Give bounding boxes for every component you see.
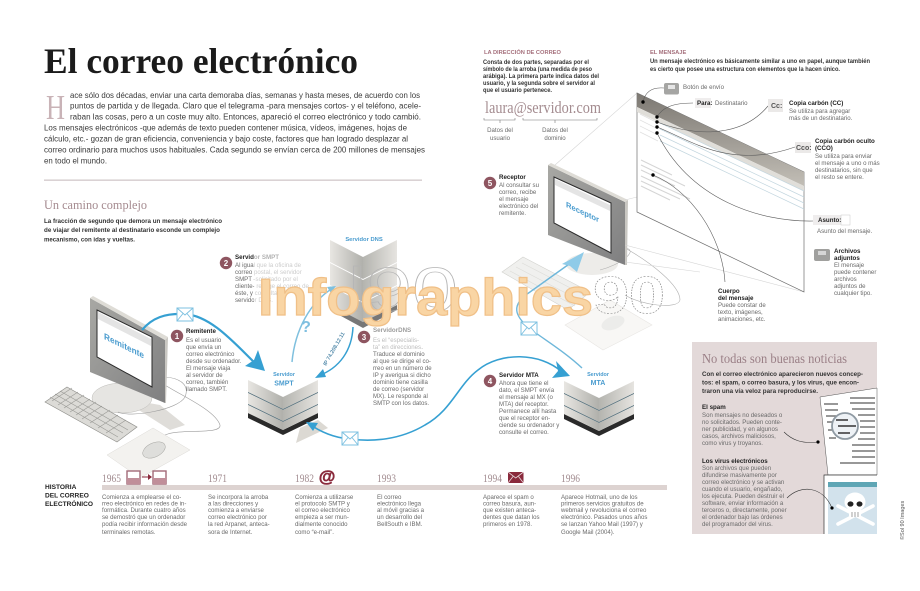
- callout: cco: el resto se entere.: [815, 174, 864, 181]
- entry 1994: que existen anteca-: [483, 507, 536, 514]
- step 1: remitente: [171, 328, 242, 393]
- spam callout line: [784, 432, 820, 444]
- step 3: servidor DNS: al que se dirige el co-: [373, 358, 431, 365]
- credit: ©Sol 90 Images: [899, 501, 906, 540]
- entry 1993: BellSouth e IBM.: [377, 521, 423, 528]
- block: los virus electrónicos: Los virus electrónicos: [702, 458, 768, 465]
- callout: cuerpo del mensaje: del mensaje: [718, 295, 754, 302]
- callout: cc: Cc:: [771, 103, 782, 110]
- callout: cco: (CCO): [815, 145, 833, 152]
- panel intro: Con el correo electrónico aparecieron nuevos concep-: [702, 371, 863, 378]
- block: el spam: El spam: [702, 404, 726, 411]
- entry 1965: [102, 471, 188, 536]
- step 4: servidor MTA: 4: [488, 377, 493, 386]
- step 3: servidor DNS: Traduce el dominio: [373, 351, 425, 358]
- step 3: servidor DNS: IP y averigua si dicho: [373, 372, 431, 379]
- arrow: SMPT to MTA: [306, 357, 570, 445]
- entry 1965: se demostró que un ordenador: [102, 514, 185, 521]
- step 3: servidor DNS: dominio tiene casilla: [373, 379, 428, 386]
- step 3: servidor DNS: de correo (servidor: [373, 386, 424, 393]
- step 5: receptor: Al consultar su: [499, 182, 539, 189]
- callout: archivos adjuntos: adjuntos de: [834, 283, 866, 290]
- icon: attachments: [814, 249, 830, 261]
- entry 1982: dialmente conocido: [295, 521, 348, 528]
- block: los virus electrónicos: terceros o, directamente, poner: [702, 507, 787, 514]
- step 1: remitente: desde su ordenador.: [186, 358, 242, 365]
- entry 1965: rreo electrónico en redes de in-: [102, 500, 186, 508]
- description: [483, 59, 599, 94]
- entry 1971: Se incorpora la arroba: [208, 494, 269, 501]
- section heading: un camino complejo: Un camino complejo: [44, 197, 147, 212]
- callout: cc: [768, 99, 853, 122]
- step 4: servidor MTA: [484, 372, 560, 436]
- description: arábiga). La primera parte indica datos del: [483, 73, 599, 80]
- entry 1982: el protocolo SMTP y: [295, 500, 351, 508]
- arrow: SMPT to DNS question: [292, 286, 336, 362]
- block: los virus electrónicos: correo electrónico y se activan: [702, 479, 784, 486]
- step 1: remitente: correo electrónico: [186, 351, 235, 358]
- projection lines: [555, 93, 804, 292]
- step 4: servidor MTA: dato, el SMPT envía: [499, 387, 555, 394]
- entry 1996: Google Mail (2004).: [561, 529, 615, 536]
- heading: LA DIRECCIÓN DE CORREO: [484, 48, 561, 56]
- step 3: servidor DNS: 3: [362, 333, 367, 342]
- description: Consta de dos partes, separadas por el: [483, 59, 589, 66]
- callout: cc: Copia carbón (CC): [789, 100, 843, 107]
- entry 1994: Aparece el spam o: [483, 494, 534, 501]
- server: MTA: MTA: [591, 380, 605, 387]
- skull and bones: [838, 492, 873, 524]
- timeline bar: [102, 485, 667, 490]
- entry 1982: Comienza a utilizarse: [295, 494, 354, 501]
- callout: asunto: [813, 215, 873, 235]
- step 2: servidor SMPT: SMPT -solicitado por el: [235, 276, 298, 283]
- entry 1971: sora de Internet.: [208, 529, 253, 536]
- description: usuario, y la segunda sobre el servidor al: [483, 80, 595, 87]
- label: datos del dominio: Datos del: [542, 127, 568, 134]
- step 4: servidor MTA: ciende su ordenador y: [499, 422, 560, 429]
- step 2: servidor SMPT: Servidor SMPT: [235, 254, 279, 261]
- image: spam inbox: [820, 388, 877, 475]
- step 3: servidor DNS: Es el “especialis-: [373, 337, 419, 344]
- block: el spam: ner publicidad, y en algunos: [702, 426, 778, 433]
- callout: cco: Copia carbón oculto: [815, 138, 875, 145]
- computer: remitente: [45, 296, 220, 478]
- intro text block: raban las cosas, pero a un coste muy alto. Entonces, apareció el correo electrónico y todo cambió.: [70, 112, 421, 121]
- mouse: [600, 313, 626, 333]
- callout: archivos adjuntos: El mensaje: [834, 262, 865, 269]
- callout: cco: destinatarios, sin que: [815, 167, 873, 174]
- callout: cco: el mensaje a uno o más: [815, 160, 880, 167]
- icon: envelope: [342, 432, 358, 445]
- stand: [566, 253, 618, 275]
- cable: [600, 248, 680, 305]
- magnifier: [832, 413, 858, 439]
- step 1: remitente: correo, también: [186, 379, 228, 386]
- icon: send button: [664, 83, 679, 94]
- callout: archivos adjuntos: puede contener: [834, 269, 876, 276]
- block: los virus electrónicos: difundirse masivamente por: [702, 472, 777, 479]
- arrow: DNS to SMPT with IP: [315, 327, 353, 378]
- block: el spam: casos, archivos maliciosos,: [702, 433, 776, 440]
- label: para: Destinatario: [715, 100, 748, 107]
- entry 1965: formática. Durante cuatro años: [102, 507, 186, 514]
- panel: el mensaje: es cierto que posee una estructura con elementos que la hacen único.: [650, 66, 840, 73]
- block: los virus electrónicos: del programador del virus.: [702, 521, 773, 528]
- mouse pad: [107, 428, 190, 478]
- description: que el usuario pertenece.: [483, 87, 552, 94]
- step 2: servidor SMPT: Al igual que la oficina de: [235, 262, 302, 269]
- step 3: servidor DNS: SMTP con los datos.: [373, 400, 429, 407]
- step 1: remitente: al servidor de: [186, 372, 223, 379]
- step 5: receptor: Receptor: [499, 174, 526, 181]
- step 5: receptor: [484, 174, 539, 217]
- callout: cuerpo del mensaje: Cuerpo: [718, 288, 740, 295]
- block: los virus electrónicos: Son archivos que pueden: [702, 465, 771, 472]
- step 3: servidor DNS: ServidorDNS: [373, 327, 411, 334]
- entry 1982: empieza a ser mun-: [295, 514, 349, 521]
- mouse pad: [565, 300, 652, 350]
- icon: red envelope: [508, 472, 524, 483]
- entry 1994: [483, 471, 540, 528]
- block: los virus electrónicos: cuando el usuario, engañado,: [702, 486, 783, 493]
- entry 1971: la red Arpanet, anteca-: [208, 521, 270, 528]
- step 4: servidor MTA: Permanece allí hasta: [499, 408, 557, 415]
- icon: at sign: @: [319, 467, 335, 486]
- entry 1996: electrónico. Pasados unos años: [561, 514, 647, 521]
- timeline title: ELECTRÓNICO: [45, 499, 93, 508]
- callout: asunto: Asunto del mensaje.: [817, 228, 873, 235]
- computer: receptor: [502, 163, 680, 350]
- entry 1982: como “e-mail”.: [295, 529, 334, 536]
- entry 1993: 1993: [377, 471, 396, 485]
- step 3: servidor DNS: MX). Le responde al: [373, 393, 428, 400]
- block: los virus electrónicos: el ordenador bajo las órdenes: [702, 514, 783, 521]
- step 1: remitente: que envía un: [186, 344, 221, 351]
- watermark orange text: Infographics: [258, 269, 593, 327]
- step 4: servidor MTA: MTA) del receptor.: [499, 401, 549, 408]
- step 2: servidor SMPT: éste, y consulta al: [235, 290, 284, 297]
- label: botón de envío: Botón de envío: [683, 84, 725, 91]
- icon: envelope: [177, 308, 193, 321]
- monitor: [548, 165, 625, 265]
- callout: archivos adjuntos: Archivos: [834, 248, 861, 255]
- description: Un mensaje electrónico es básicamente similar a uno en papel, aunque también: [650, 58, 870, 65]
- callout: cc: más de un destinatario.: [789, 115, 853, 122]
- panel: la dirección de correo: dominio: [544, 135, 566, 142]
- step 2: servidor SMPT: [220, 254, 309, 304]
- server: SMPT: SMPT: [274, 380, 294, 388]
- brackets: [484, 118, 597, 123]
- block: el spam: Son mensajes no deseados o: [702, 412, 783, 419]
- server label: Servidor: [587, 372, 610, 378]
- callout: cco: Cco:: [796, 145, 812, 152]
- entry 1965: terminales remotas.: [102, 529, 156, 536]
- entry 1994: correo basura, aun-: [483, 500, 536, 508]
- callout: archivos adjuntos: cualquier tipo.: [834, 290, 872, 297]
- step 3: servidor DNS: [358, 327, 432, 407]
- entry 1982: [295, 471, 354, 536]
- cables: [118, 377, 220, 440]
- arrow: MTA to receptor: [517, 252, 584, 368]
- entry 1971: comienza a enviarse: [208, 507, 264, 514]
- server: DNS: [330, 222, 397, 328]
- step 5: receptor: correo, recibe: [499, 189, 537, 196]
- screen label: Remitente: [104, 331, 144, 361]
- block: el spam: no solicitados. Pueden conte-: [702, 419, 782, 426]
- step 2: servidor SMPT: 2: [224, 259, 229, 268]
- entry 1971: a las direcciones y: [208, 500, 259, 508]
- step 3: servidor DNS: ta” en direcciones.: [373, 344, 423, 351]
- virus callout line: [787, 489, 834, 510]
- step 5: receptor: electrónico del: [499, 203, 538, 210]
- entry 1994: 1994: [483, 471, 502, 485]
- section intro text: [44, 218, 222, 244]
- icon: envelope: [521, 322, 537, 335]
- title: El correo electrónico: [44, 41, 358, 81]
- block: el spam: como virus y troyanos.: [702, 440, 763, 447]
- entry 1996: 1996: [561, 471, 580, 485]
- panel: no todas son buenas noticias: [692, 342, 877, 534]
- step 2: servidor SMPT: correo postal, el servidor: [235, 269, 302, 276]
- callout: archivos adjuntos: archivos: [834, 276, 857, 283]
- entry 1993: un desarrollo del: [377, 514, 422, 521]
- arrow: remitente to SMPT: [142, 308, 265, 371]
- message window: [637, 93, 804, 292]
- entry 1965: 1965: [102, 471, 121, 485]
- step 4: servidor MTA: consulte el correo.: [499, 429, 549, 436]
- watermark dashed number: 90: [593, 267, 665, 325]
- email address: laura@servidor.com: [485, 98, 601, 117]
- entry 1994: dentes que datan los: [483, 514, 540, 521]
- keyboard: [45, 387, 137, 442]
- label: para: Para:: [697, 100, 712, 107]
- watermark outline: l90: [348, 256, 458, 325]
- server label: Servidor: [273, 372, 296, 378]
- panel: la dirección de correo: usuario: [490, 135, 511, 142]
- step 1: remitente: Remitente: [186, 328, 216, 335]
- callout: cuerpo del mensaje: texto, imágenes,: [718, 309, 763, 316]
- timeline: historia del correo electrónico: [45, 467, 667, 536]
- entry 1971: [208, 471, 270, 536]
- callout dots: [641, 100, 659, 177]
- callout: cuerpo del mensaje: [718, 288, 766, 323]
- panel: la dirección de correo: [483, 48, 601, 142]
- section intro text: La fracción de segundo que demora un mensaje electrónico: [44, 218, 222, 225]
- drop cap: H: [46, 88, 65, 127]
- timeline title: DEL CORREO: [45, 493, 89, 500]
- IP label: IP 74.208.12.11: [323, 331, 347, 367]
- block: los virus electrónicos: los ejecuta. Pueden destruir el: [702, 493, 784, 500]
- timeline title: [45, 484, 93, 508]
- callout: archivos adjuntos: adjuntos: [834, 255, 860, 262]
- entry 1996: se lanzan Yahoo Mail (1997) y: [561, 521, 644, 528]
- step 2: servidor SMPT: servidor DNS.: [235, 297, 273, 304]
- entry 1971: 1971: [208, 471, 227, 485]
- description: símbolo de la arroba (una medida de peso: [483, 66, 592, 73]
- step 4: servidor MTA: que el receptor en-: [499, 415, 550, 422]
- entry 1993: El correo: [377, 494, 402, 501]
- question mark: ?: [301, 319, 311, 336]
- section intro text: de viajar del remitente al destinatario esconde un complejo: [44, 227, 220, 234]
- heading: EL MENSAJE: [650, 50, 686, 56]
- entry 1996: [560, 471, 647, 536]
- intro text block: cálculo, etc.- gozan de gran eficiencia, conveniencia y bajo coste, factores que han logrado desplazar al: [44, 134, 408, 143]
- callout: cuerpo del mensaje: Puede constar de: [718, 302, 766, 309]
- callout lines: [643, 88, 813, 282]
- block: los virus electrónicos: software, enviar información a: [702, 500, 784, 507]
- icon: two computers: [127, 471, 166, 484]
- step 1: remitente: 1: [175, 332, 180, 341]
- callout: asunto: Asunto:: [818, 217, 841, 224]
- entry 1993: [377, 471, 425, 528]
- step 1: remitente: Es el usuario: [186, 337, 222, 344]
- callout: archivos adjuntos: [834, 248, 876, 297]
- entry 1996: webmail y revoluciona el correo: [560, 507, 647, 514]
- block: los virus electrónicos: [702, 458, 787, 528]
- intro text block: puntos de partida y de llegada. Claro que el telegrama -para mensajes cortos- y el teléfono, acele-: [70, 102, 421, 111]
- intro text block: correo ordinario para muchos usos habituales. Cada segundo se envían cerca de 200 millones de mensajes: [44, 145, 425, 154]
- panel intro: traron una vía veloz para reproducirse.: [702, 388, 818, 395]
- step 5: receptor: el mensaje: [499, 196, 529, 203]
- intro text block: [44, 88, 425, 165]
- watermark: [258, 256, 665, 327]
- step 5: receptor: remitente.: [499, 210, 526, 217]
- panel: el mensaje: [555, 50, 880, 323]
- entry 1994: primeros en 1978.: [483, 521, 532, 528]
- entry 1965: podía recibir información desde: [102, 521, 188, 528]
- server: MTA: [564, 362, 634, 436]
- step 4: servidor MTA: Servidor MTA: [499, 372, 539, 379]
- monitor: [90, 298, 165, 403]
- step 1: remitente: El mensaje viaja: [186, 365, 231, 372]
- entry 1982: 1982: [295, 471, 314, 485]
- screen label: Receptor: [566, 199, 600, 225]
- entry 1996: primeros servicios gratuitos de: [561, 500, 644, 508]
- mouse: [140, 439, 168, 461]
- entry 1982: el correo electrónico: [295, 507, 350, 514]
- server label: Servidor DNS: [345, 237, 383, 243]
- keyboard: [502, 257, 590, 310]
- step 5: receptor: 5: [488, 179, 493, 188]
- image: virus warning: [824, 475, 877, 534]
- timeline title: HISTORIA: [45, 484, 77, 491]
- panel intro: [702, 371, 863, 395]
- step 1: remitente: llamado SMPT.: [186, 386, 227, 393]
- entry 1996: Aparece Hotmail, uno de los: [561, 494, 638, 501]
- entry 1971: correo electrónico por: [208, 514, 267, 521]
- section intro text: mecanismo, con idas y vueltas.: [44, 236, 135, 244]
- entry 1993: electrónico llega: [377, 500, 422, 508]
- label: para: [695, 98, 748, 108]
- entry 1965: Comienza a emplearse el co-: [102, 494, 181, 501]
- step 4: servidor MTA: Ahora que tiene el: [499, 380, 548, 387]
- intro text block: ace sólo dos décadas, enviar una carta demoraba días, semanas y hasta meses, de acuerdo con los: [70, 91, 420, 100]
- shadow and stand: [120, 398, 185, 430]
- block: el spam: [702, 404, 783, 447]
- callout: cc: Se utiliza para agregar: [789, 108, 850, 115]
- intro text block: en todo el mundo.: [44, 156, 107, 165]
- intro text block: Los mensajes electrónicos -que además de texto pueden contener música, vídeos, imágenes, hojas de: [44, 123, 407, 132]
- callout: cco: [795, 138, 880, 181]
- step 2: servidor SMPT: cliente- recoge el correo de: [235, 283, 309, 290]
- entry 1993: al móvil gracias a: [377, 507, 425, 514]
- step 3: servidor DNS: rreo en un número de: [373, 365, 432, 372]
- label: datos del usuario: Datos del: [487, 127, 513, 134]
- server: SMPT: [248, 362, 328, 443]
- step 4: servidor MTA: el mensaje al MX (o: [499, 394, 553, 401]
- callout: cuerpo del mensaje: animaciones, etc.: [718, 316, 766, 323]
- panel intro: tos: el spam, o correo basura, y los virus, que encon-: [702, 380, 859, 386]
- callout: cco: Se utiliza para enviar: [815, 153, 872, 160]
- heading: No todas son buenas noticias: [702, 352, 847, 367]
